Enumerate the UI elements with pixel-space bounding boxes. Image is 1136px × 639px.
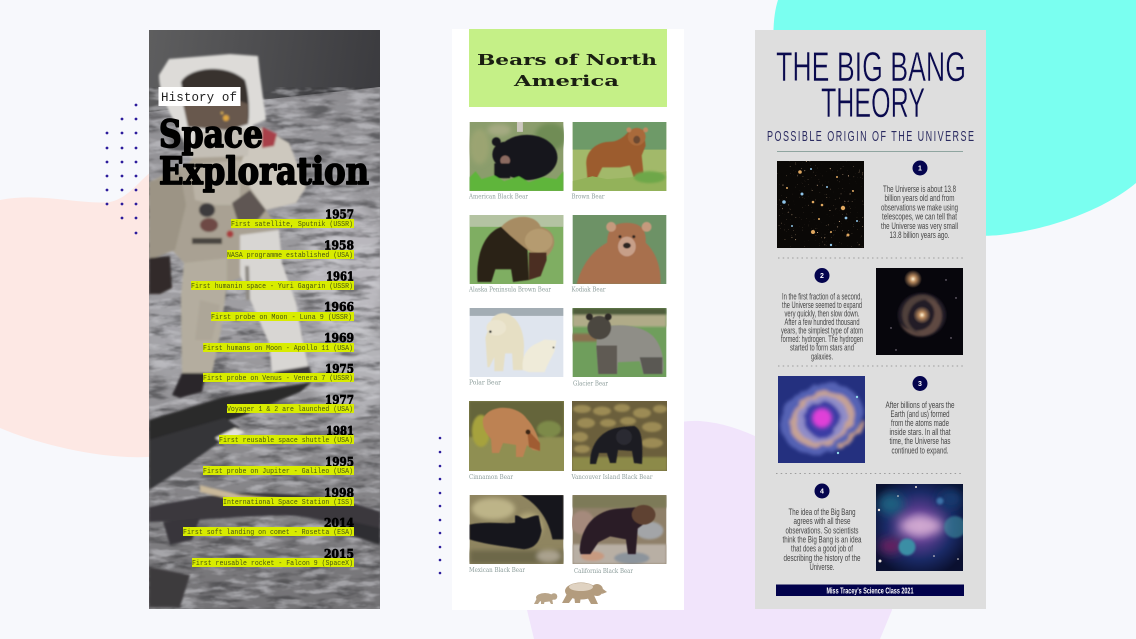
- panel: bears of north america: [452, 29, 684, 610]
- text block 3: continued to expand.: [892, 446, 948, 456]
- astronaut figure: [149, 127, 313, 398]
- text block 4: that does a good job of: [791, 544, 853, 554]
- event 1998: [223, 485, 354, 507]
- step number 1: [912, 160, 928, 176]
- footer credit bar: Miss Tracey's Science Class 2021: [826, 586, 914, 596]
- photo: mexican black bear: [469, 495, 564, 564]
- photo: brown bear: [572, 122, 667, 191]
- label: history of: History of: [161, 91, 237, 105]
- event 1977: 1977: [325, 392, 354, 407]
- timeline: [183, 206, 354, 568]
- text block 2: started to form stars and: [790, 342, 854, 354]
- event 1966: [211, 299, 354, 322]
- event 2015: [192, 546, 354, 568]
- image: spiral galaxy: [876, 268, 963, 355]
- event 1969: First humans on Moon - Apollo 11 (USA): [203, 345, 353, 353]
- text block 4: describing the history of the: [784, 553, 860, 564]
- background blob: lilac: [527, 421, 892, 639]
- step number 4: [814, 484, 830, 498]
- event 1961: 1961: [326, 268, 354, 284]
- event 2015: First reusable rocket - Falcon 9 (SpaceX): [192, 560, 353, 568]
- heading: space exploration: Space: [159, 112, 263, 156]
- event 1981: First reusable space shuttle (USA): [219, 437, 353, 445]
- text block 2: galaxies.: [811, 352, 833, 362]
- text block 1: telescopes, we can tell that: [882, 212, 957, 222]
- text block 2: the Universe seemed to expand: [782, 300, 862, 311]
- text block 1: 13.8 billion years ago.: [890, 230, 950, 241]
- event 1958: 1958: [324, 238, 354, 252]
- text block 1: The Universe is about 13.8: [883, 184, 956, 195]
- step number 2: [814, 268, 830, 283]
- text block 3: [886, 400, 954, 456]
- image: deep field stars: [777, 161, 864, 248]
- text block 3: from the atoms made: [891, 418, 949, 429]
- step number 4: 4: [820, 488, 824, 496]
- event 1966: First probe on Moon - Luna 9 (USSR): [211, 314, 352, 322]
- event 2014: [183, 515, 354, 537]
- event 1981: [219, 423, 354, 445]
- text block 4: agrees with all these: [794, 516, 850, 527]
- event 1977: Voyager 1 & 2 are launched (USA): [227, 406, 353, 414]
- text block 4: Universe.: [810, 562, 834, 573]
- label: alaska peninsula brown bear: Alaska Peninsula Brown Bear: [468, 286, 551, 294]
- event 1969: [203, 330, 354, 353]
- text block 3: inside stars. In all that: [890, 427, 951, 438]
- event 1995: [203, 454, 354, 476]
- text block 2: [781, 292, 863, 362]
- event 1958: NASA programme established (USA): [227, 252, 353, 260]
- heading: the big bang theory: THEORY: [821, 79, 925, 126]
- text block 1: [881, 184, 958, 241]
- heading: space exploration: Exploration: [159, 149, 369, 193]
- event 2015: 2015: [324, 546, 354, 561]
- text block 1: observations we make using: [881, 202, 958, 214]
- step number 1: 1: [918, 166, 922, 172]
- text block 1: the Universe was very small: [881, 221, 958, 232]
- event 1969: 1969: [324, 330, 354, 345]
- label: polar bear: Polar Bear: [469, 380, 501, 386]
- helmet: [159, 54, 266, 158]
- label: history of: [158, 87, 240, 106]
- text block 1: billion years old and from: [884, 193, 955, 204]
- panel: space exploration: [146, 30, 390, 609]
- event 1975: First probe on Venus - Venera 7 (USSR): [203, 375, 353, 383]
- label: mexican black bear: Mexican Black Bear: [469, 567, 525, 574]
- heading: bears of north america: [469, 29, 667, 107]
- label: glacier bear: Glacier Bear: [573, 380, 608, 388]
- photo: glacier bear: [572, 308, 667, 377]
- text block 3: After billions of years the: [886, 400, 954, 411]
- heading: bears of north america: America: [512, 72, 619, 90]
- dot pattern: centre: [439, 437, 441, 574]
- event 1957: First satellite, Sputnik (USSR): [231, 221, 353, 229]
- text block 2: After a few hundred thousand: [784, 317, 860, 328]
- footer credit bar: [776, 584, 964, 596]
- heading: bears of north america: Bears of North: [477, 51, 657, 69]
- step number 3: 3: [918, 381, 922, 388]
- event 1961: First humanin space - Yuri Gagarin (USSR): [191, 283, 353, 291]
- event 1958: [227, 238, 354, 260]
- background blob: cyan: [773, 0, 1136, 236]
- step number 3: [912, 376, 928, 391]
- astronaut on the moon photo: [149, 30, 380, 609]
- label: vancouver island black bear: Vancouver Island Black Bear: [571, 474, 653, 481]
- photo: polar bear: [470, 308, 564, 377]
- event 2014: 2014: [324, 515, 354, 530]
- label: brown bear: Brown Bear: [572, 194, 605, 200]
- event 1961: [191, 268, 354, 291]
- event 1995: First probe on Jupiter - Galileo (USA): [203, 468, 353, 476]
- text block 2: formed: hydrogen. The hydrogen: [781, 334, 863, 345]
- photo: vancouver island black bear: [572, 401, 667, 471]
- dot pattern: left: [106, 104, 137, 234]
- text block 4: The idea of the Big Bang: [788, 507, 856, 518]
- event 1995: 1995: [325, 454, 354, 469]
- label: cinnamon bear: Cinnamon Bear: [469, 474, 513, 481]
- small bear: [534, 593, 557, 604]
- step number 2: 2: [820, 273, 824, 280]
- event 1957: 1957: [325, 206, 354, 222]
- image: colourful nebula with planets: [876, 484, 963, 571]
- heading: space exploration: [159, 112, 369, 193]
- text block 3: Earth (and us) formed: [890, 409, 950, 420]
- icon: two walking bears: [534, 582, 607, 604]
- photo: alaska peninsula brown bear: [470, 215, 564, 284]
- background blob: peach: [0, 165, 160, 457]
- text block 2: In the first fraction of a second,: [782, 292, 862, 302]
- label: california black bear: California Black Bear: [574, 568, 633, 575]
- event 1966: 1966: [324, 299, 354, 314]
- text block 2: years, the simplest type of atom: [781, 326, 863, 336]
- text block 2: very quickly, then slow down.: [784, 308, 860, 320]
- event 1998: International Space Station (ISS): [223, 499, 353, 507]
- subtitle: POSSIBLE ORIGIN OF THE UNIVERSE: [767, 128, 974, 145]
- text block 4: [782, 507, 862, 573]
- photo: cinnamon bear: [469, 401, 564, 471]
- label: kodiak bear: Kodiak Bear: [572, 286, 606, 294]
- heading: the big bang theory: THE BIG BANG: [776, 43, 966, 90]
- event 1975: [203, 361, 354, 383]
- photo: kodiak bear: [572, 215, 666, 284]
- image: helix nebula: [778, 376, 865, 463]
- event 1981: 1981: [326, 423, 354, 438]
- event 1975: 1975: [325, 361, 354, 376]
- event 1977: [227, 392, 354, 414]
- photo: california black bear: [572, 495, 667, 564]
- heading: the big bang theory: [776, 43, 966, 126]
- text block 3: time, the Universe has: [890, 436, 951, 447]
- event 1957: [231, 206, 354, 229]
- event 2014: First soft landing on comet - Rosetta (ESA): [183, 529, 353, 537]
- panel: the big bang theory: [755, 30, 986, 609]
- photo: american black bear: [469, 122, 564, 191]
- text block 4: think the Big Bang is an idea: [782, 534, 862, 546]
- large bear: [562, 582, 607, 604]
- label: american black bear: American Black Bear: [468, 194, 528, 200]
- event 1998: 1998: [324, 485, 354, 500]
- text block 4: observations. So scientists: [786, 526, 859, 536]
